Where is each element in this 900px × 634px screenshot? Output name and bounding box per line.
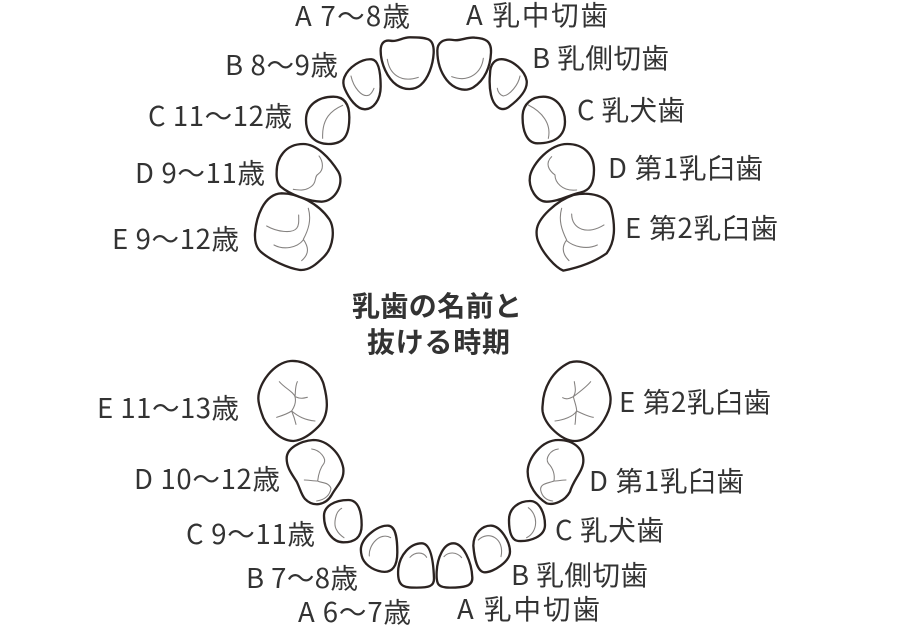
tooth: lower right D xyxy=(528,440,583,504)
labels: lower left ages: B 7〜8歳 xyxy=(246,556,358,596)
tooth: lower left C xyxy=(324,500,362,542)
labels: lower left ages: C 9〜11歳 xyxy=(186,512,315,552)
labels: upper right names: D 第1乳臼歯 xyxy=(608,146,763,186)
lower left teeth xyxy=(258,361,434,588)
tooth: lower right B xyxy=(473,526,510,572)
labels: lower left ages: D 10〜12歳 xyxy=(134,457,280,497)
tooth: lower right C xyxy=(509,501,545,541)
labels: lower right names: C 乳犬歯 xyxy=(555,508,664,548)
tooth: upper left E xyxy=(255,193,333,270)
title: 乳歯の名前と xyxy=(352,285,522,325)
tooth: lower left A xyxy=(398,543,434,588)
tooth: lower left D xyxy=(287,440,343,504)
tooth: lower right E xyxy=(542,361,611,441)
labels: upper left ages: B 8〜9歳 xyxy=(225,43,338,83)
upper left teeth xyxy=(255,37,434,270)
tooth: upper left B xyxy=(343,59,381,109)
labels: upper right names: C 乳犬歯 xyxy=(577,88,685,128)
tooth: upper left A xyxy=(381,37,434,89)
tooth: lower left B xyxy=(361,526,397,572)
labels: lower right names xyxy=(457,380,771,627)
tooth: upper left D xyxy=(277,144,340,202)
tooth: upper right D xyxy=(530,144,594,202)
title xyxy=(352,285,522,361)
tooth: upper right C xyxy=(523,97,565,143)
labels: lower left ages: A 6〜7歳 xyxy=(298,590,411,630)
labels: upper left ages: E 9〜12歳 xyxy=(112,217,239,257)
labels: upper right names: E 第2乳臼歯 xyxy=(625,206,778,246)
labels: lower right names: E 第2乳臼歯 xyxy=(619,380,771,420)
labels: upper left ages xyxy=(112,0,410,257)
labels: upper left ages: D 9〜11歳 xyxy=(135,151,265,191)
tooth: lower right A xyxy=(437,543,472,588)
tooth: lower left E xyxy=(258,361,327,441)
tooth: upper left C xyxy=(306,97,349,144)
title: 抜ける時期 xyxy=(367,321,510,361)
labels: upper left ages: C 11〜12歳 xyxy=(148,94,292,134)
labels: upper right names: B 乳側切歯 xyxy=(532,36,669,76)
tooth: upper right B xyxy=(490,59,527,109)
labels: lower left ages: E 11〜13歳 xyxy=(97,386,239,426)
tooth: upper right E xyxy=(537,194,614,271)
labels: lower right names: B 乳側切歯 xyxy=(511,553,648,593)
labels: lower left ages xyxy=(97,386,411,630)
tooth: upper right A xyxy=(437,38,491,90)
labels: upper right names xyxy=(466,0,778,246)
labels: lower right names: D 第1乳臼歯 xyxy=(589,459,744,499)
labels: lower right names: A 乳中切歯 xyxy=(457,587,600,627)
upper right teeth xyxy=(437,38,614,271)
lower right teeth xyxy=(437,361,611,588)
